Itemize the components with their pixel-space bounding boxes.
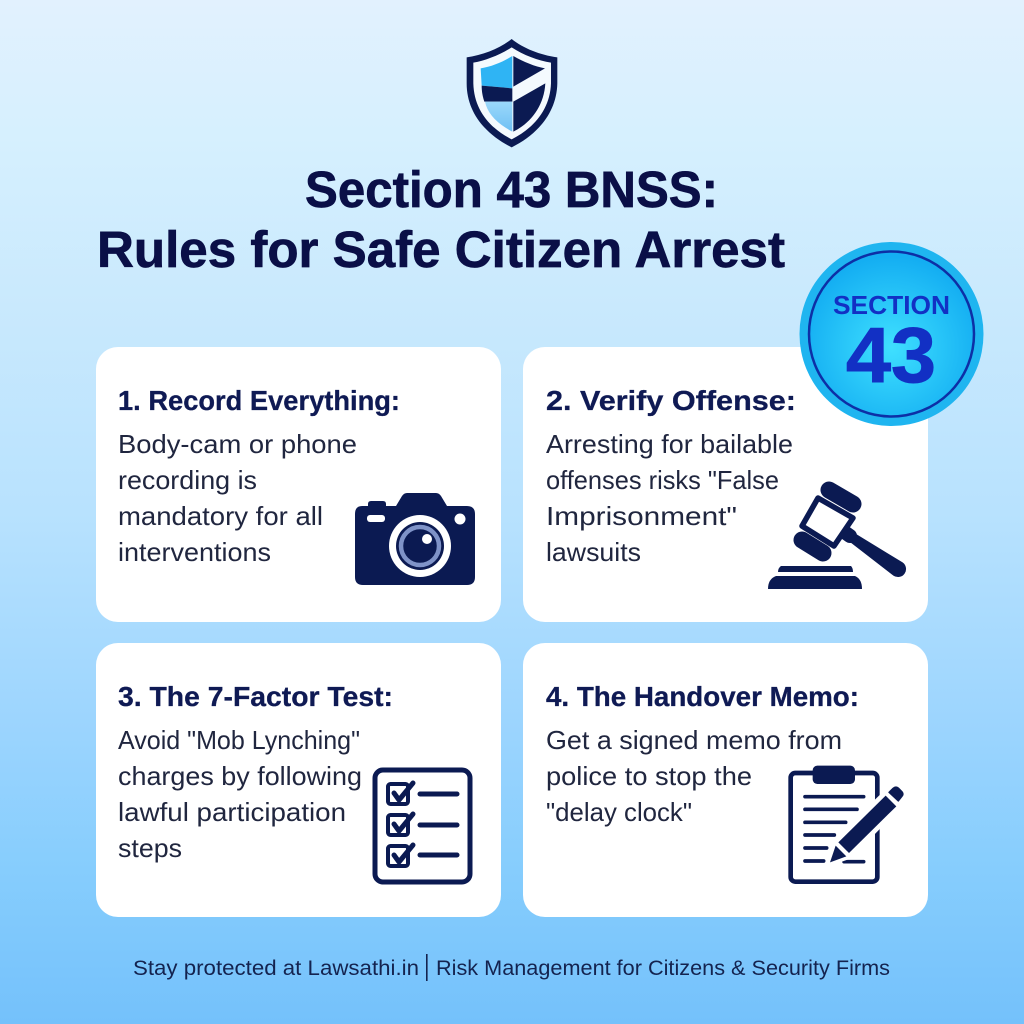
panel: verify offense bbox=[523, 347, 928, 622]
text: 7-factor test body bbox=[118, 725, 362, 863]
footer: Stay protected at Lawsathi.in bbox=[133, 957, 419, 980]
icon: camera bbox=[355, 493, 475, 585]
footer bbox=[133, 954, 890, 981]
text: 7-factor test body: steps bbox=[118, 833, 182, 863]
text: verify offense body: offenses risks "False bbox=[546, 465, 779, 495]
text: verify offense body: Arresting for bailable bbox=[546, 429, 793, 459]
icon: gavel bbox=[768, 490, 906, 589]
panel: handover memo bbox=[523, 643, 928, 917]
icon: shield logo bbox=[467, 39, 557, 147]
text: record everything body: Body-cam or phone bbox=[118, 429, 357, 459]
text: 7-factor test body: lawful participation bbox=[118, 797, 346, 827]
badge: section 43 bbox=[800, 242, 984, 426]
panel: record everything bbox=[96, 347, 501, 622]
heading: handover memo: 4. The Handover Memo: bbox=[546, 681, 859, 712]
title: Rules for Safe Citizen Arrest bbox=[97, 221, 785, 278]
text: 7-factor test body: charges by following bbox=[118, 761, 362, 791]
text: verify offense body: lawsuits bbox=[546, 537, 641, 567]
title bbox=[97, 161, 785, 278]
badge: section 43: SECTION bbox=[833, 290, 950, 320]
text: verify offense body: Imprisonment" bbox=[546, 501, 737, 531]
text: record everything body: interventions bbox=[118, 537, 271, 567]
footer: Risk Management for Citizens & Security Firms bbox=[436, 957, 890, 980]
heading: verify offense: 2. Verify Offense: bbox=[546, 385, 796, 416]
text: handover memo body: Get a signed memo from bbox=[546, 725, 842, 755]
heading: 7-factor test: 3. The 7-Factor Test: bbox=[118, 681, 393, 712]
badge: section 43: 43 bbox=[846, 311, 936, 399]
text: record everything body: recording is bbox=[118, 465, 257, 495]
text: verify offense body bbox=[546, 429, 793, 567]
text: handover memo body: police to stop the bbox=[546, 761, 752, 791]
title: Section 43 BNSS: bbox=[305, 161, 718, 218]
text: record everything body bbox=[118, 429, 357, 567]
panel: 7-factor test bbox=[96, 643, 501, 917]
text: handover memo body: "delay clock" bbox=[546, 797, 692, 827]
text: 7-factor test body: Avoid "Mob Lynching" bbox=[118, 725, 360, 755]
heading: record everything: 1. Record Everything: bbox=[118, 385, 400, 416]
icon: clipboard and pencil bbox=[791, 766, 907, 882]
text: handover memo body bbox=[546, 725, 842, 827]
text: record everything body: mandatory for all bbox=[118, 501, 323, 531]
icon: checklist bbox=[375, 770, 470, 882]
